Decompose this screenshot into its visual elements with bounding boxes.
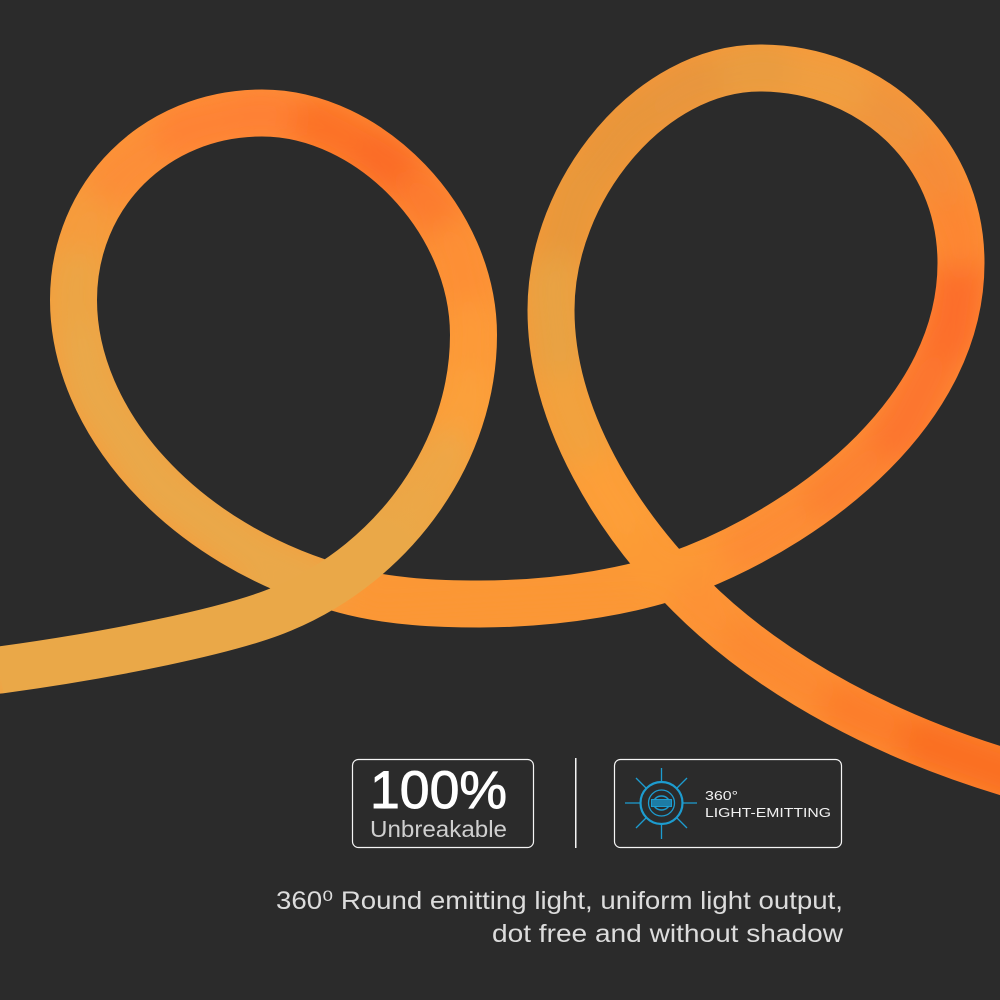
divider [575,758,576,848]
icon: light rays [625,768,697,839]
description text [276,887,844,948]
badge number: 100% [370,761,507,820]
description text: dot free and without shadow [492,920,844,948]
neon LED strip [0,44,1000,796]
badge caption: Unbreakable [370,816,507,842]
icon label [705,788,831,820]
description text: 360⁰ Round emitting light, uniform light output, [276,887,843,915]
badge: 100% unbreakable [352,760,534,848]
badge: 360 light-emitting [614,760,842,848]
icon label: 360° [705,788,738,803]
icon label: LIGHT-EMITTING [705,805,831,820]
